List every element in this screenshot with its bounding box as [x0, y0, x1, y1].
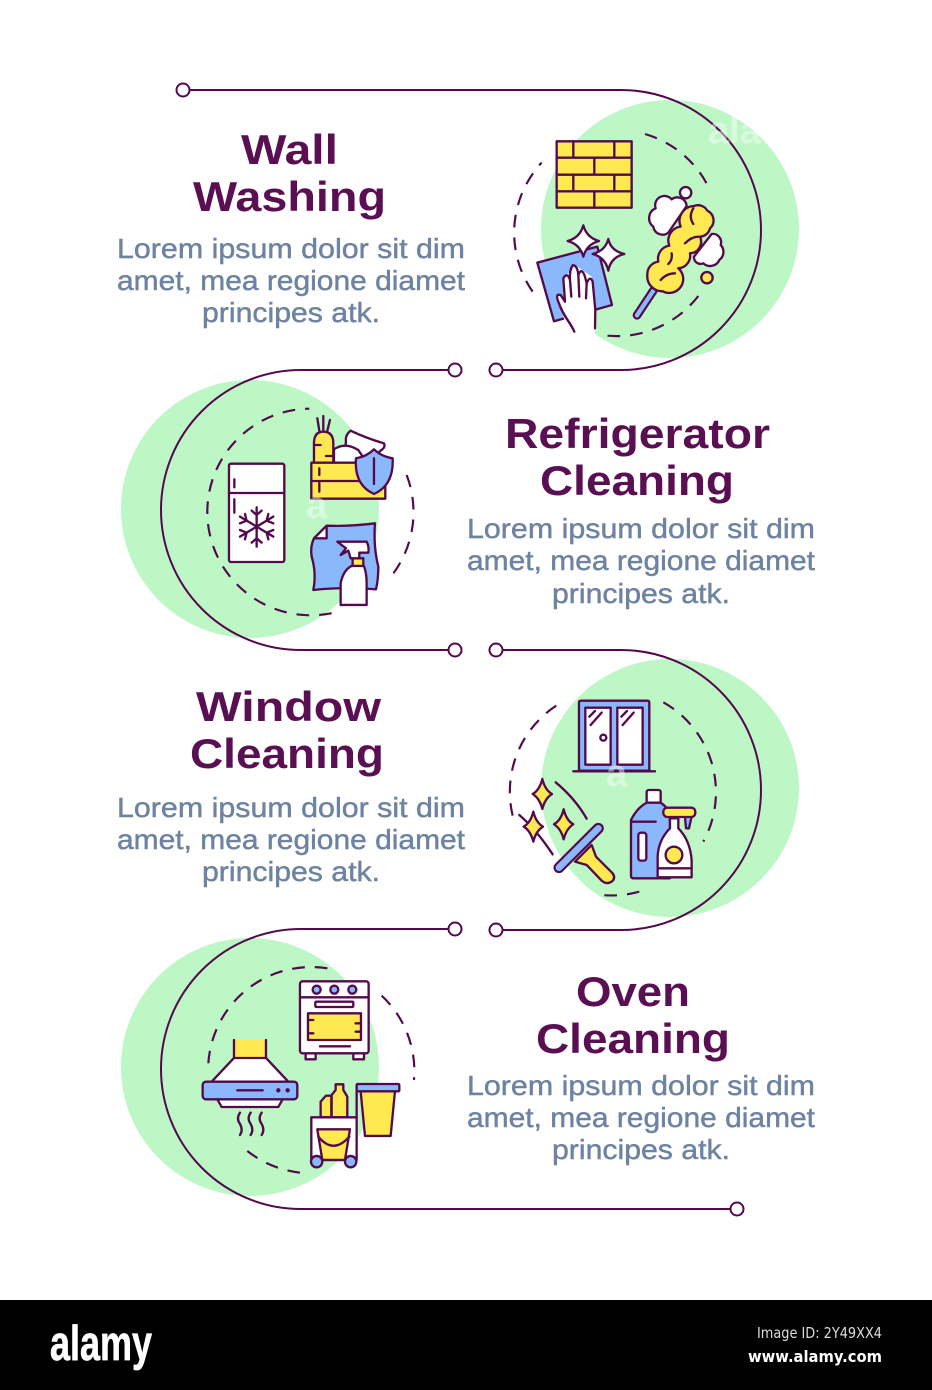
text block: window: amet, mea regione diamet: [117, 824, 465, 855]
green circle: refrigerator: [121, 380, 379, 638]
connector line: third: [490, 644, 761, 936]
heading: wall washing: Wall: [241, 126, 338, 173]
icon group: wall washing: [514, 134, 723, 338]
connector line: second: [161, 364, 462, 656]
heading: refrigerator cleaning: Refrigerator: [505, 410, 770, 457]
icon: hand wiping with cloth: [537, 225, 624, 338]
icon: cooker hood: [203, 1040, 297, 1135]
text block: refrigerator: Lorem ipsum dolor sit dim: [467, 513, 815, 544]
watermark: ala: [708, 110, 762, 152]
icon: squeegee with sparkles: [519, 779, 614, 883]
panel: wall washing: [117, 84, 799, 376]
panel: oven cleaning: [121, 922, 815, 1216]
icon: brick wall: [557, 141, 632, 208]
heading: wall washing: [193, 126, 386, 220]
panel: window cleaning: [117, 644, 799, 936]
text block: wall washing: principes atk.: [202, 297, 380, 328]
heading: oven cleaning: [536, 968, 730, 1062]
dashed ring: [510, 702, 716, 895]
logo text: alamy: [50, 1317, 152, 1371]
dashed ring: [514, 134, 708, 336]
website: www.alamy.com: [748, 1347, 882, 1366]
text block: wall washing: Lorem ipsum dolor sit dim: [117, 233, 465, 264]
green circle: oven: [121, 938, 379, 1196]
icon: detergent bottles: [631, 790, 695, 878]
heading: wall washing: Washing: [193, 173, 386, 220]
text block: refrigerator: principes atk.: [552, 578, 730, 609]
heading: refrigerator cleaning: Cleaning: [540, 457, 734, 504]
icon: fridge: [229, 464, 284, 562]
heading: oven cleaning: Cleaning: [536, 1015, 730, 1062]
text block: refrigerator: [467, 513, 815, 609]
text block: window: [117, 792, 465, 887]
icon group: window: [510, 701, 716, 895]
icon group: oven: [203, 967, 414, 1173]
icon: cloth and spray bottle: [311, 523, 378, 605]
text block: window: Lorem ipsum dolor sit dim: [117, 792, 465, 823]
connector line: top: [176, 84, 761, 376]
icon: window: [573, 701, 655, 771]
dashed ring: [208, 967, 414, 1173]
text block: wall washing: amet, mea regione diamet: [117, 265, 465, 296]
text block: oven: [467, 1070, 815, 1165]
image id: Image ID: 2Y49XX4: [757, 1324, 882, 1342]
icon: duster: [637, 187, 723, 315]
icon: oven: [300, 981, 369, 1059]
text block: refrigerator: amet, mea regione diamet: [467, 545, 815, 576]
text block: window: principes atk.: [202, 856, 380, 887]
watermark: a: [606, 753, 628, 795]
heading: oven cleaning: Oven: [576, 968, 690, 1015]
icon: cleaning cart and bin: [311, 1084, 399, 1167]
text block: wall washing: [117, 233, 465, 328]
panel: refrigerator cleaning: [121, 364, 815, 656]
heading: window cleaning: [190, 683, 384, 777]
footer bar: [0, 1300, 932, 1390]
dashed ring: [207, 409, 414, 615]
text block: oven: amet, mea regione diamet: [467, 1102, 815, 1133]
green circle: wall washing: [541, 100, 799, 358]
heading: window cleaning: Cleaning: [190, 730, 384, 777]
watermark: a: [306, 485, 328, 527]
text block: oven: principes atk.: [552, 1134, 730, 1165]
heading: window cleaning: Window: [196, 683, 381, 730]
green circle: window: [541, 659, 799, 917]
text block: oven: Lorem ipsum dolor sit dim: [467, 1070, 815, 1101]
heading: refrigerator cleaning: [505, 410, 770, 504]
connector line: bottom: [161, 922, 744, 1216]
icon group: refrigerator: [207, 409, 414, 615]
icon: food crate with shield: [311, 416, 393, 499]
